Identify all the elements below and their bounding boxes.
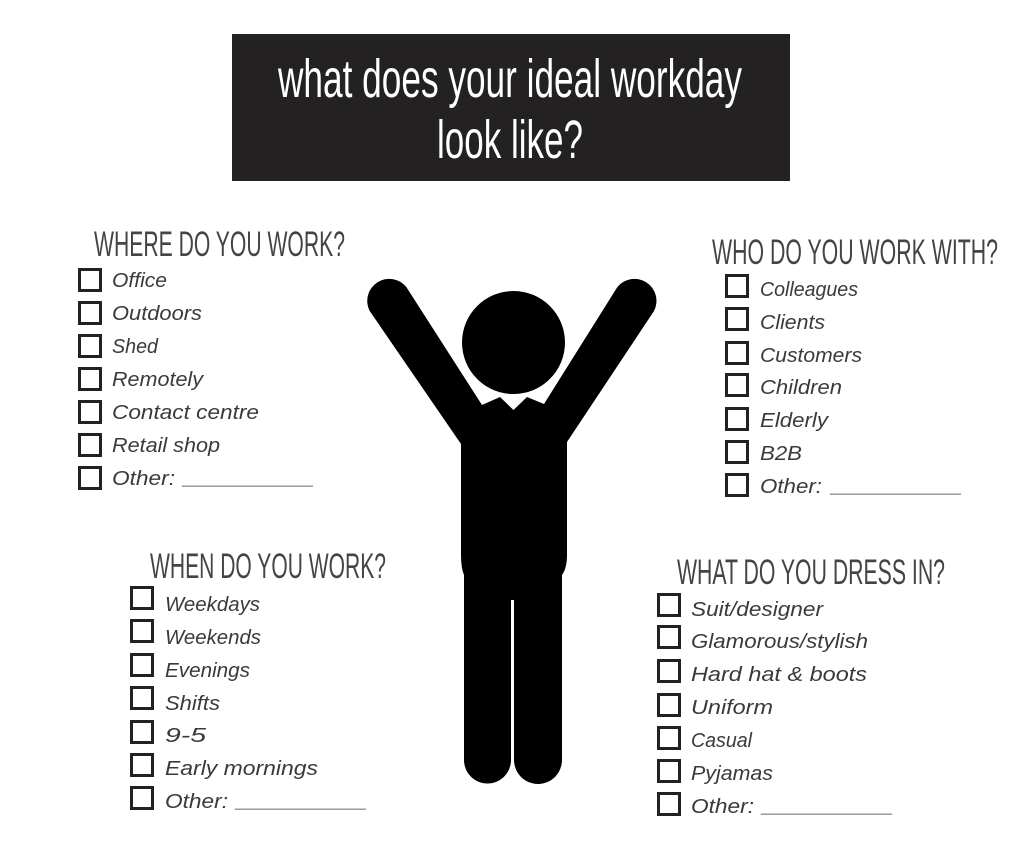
checklist: when do you work: 9-5 [165,725,207,747]
checklist: who do you work with: B2B [760,443,802,465]
title banner [232,34,790,181]
checklist: what do you dress in: Uniform [691,697,773,719]
checklist: when do you work: Weekends [165,627,261,649]
checklist: when do you work: ______________ [234,790,367,812]
checklist: where do you work: Contact centre [112,402,259,424]
checklist: where do you work [80,270,314,490]
checklist: where do you work: Office [112,270,167,292]
checklist: what do you dress in: Hard hat & boots [691,664,867,686]
checklist: what do you dress in [658,594,893,818]
checklist: where do you work: Shed [112,336,159,358]
checklist: when do you work: Early mornings [165,758,318,780]
checklist: who do you work with: Colleagues [760,279,858,301]
panel: where do you work [80,225,345,490]
checklist: what do you dress in: Other: [691,796,754,818]
checklist: who do you work with: Customers [760,345,862,367]
checklist: who do you work with: Other: [760,476,822,498]
panel: what do you dress in [658,553,945,818]
title banner: look like? [437,110,583,170]
checklist: what do you dress in: ______________ [760,795,893,817]
checklist: who do you work with: Elderly [760,410,829,432]
checklist: when do you work: Shifts [165,693,220,715]
checklist: who do you work with: ______________ [829,475,962,497]
title banner: what does your ideal workday [277,49,742,109]
checklist: who do you work with: Clients [760,312,825,334]
checklist: who do you work with: Children [760,377,842,399]
checklist: when do you work [132,588,367,813]
checklist: where do you work: Outdoors [112,303,202,325]
checklist: what do you dress in: Casual [691,730,753,752]
checklist: where do you work: Remotely [112,369,204,391]
heading: when do you work: WHEN DO YOU WORK? [150,547,386,586]
panel: when do you work [132,547,386,813]
checklist: when do you work: Weekdays [165,594,260,616]
heading: where do you work: WHERE DO YOU WORK? [94,225,345,264]
checklist: what do you dress in: Glamorous/stylish [691,631,868,653]
checklist: who do you work with [726,276,962,498]
checklist: when do you work: Other: [165,791,228,813]
icon: person with raised arms [367,279,656,784]
checklist: where do you work: Other: [112,468,175,490]
panel: who do you work with [712,233,998,498]
checklist: where do you work: ______________ [181,467,314,489]
checklist: when do you work: Evenings [165,660,250,682]
checklist: where do you work: Retail shop [112,435,220,457]
checklist: what do you dress in: Pyjamas [691,763,773,785]
checklist: what do you dress in: Suit/designer [691,599,825,621]
